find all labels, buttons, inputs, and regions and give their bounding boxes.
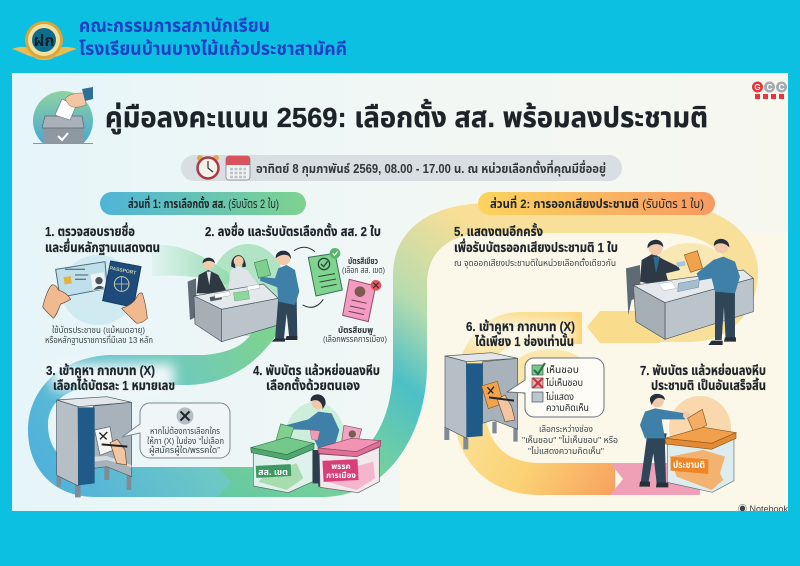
callout text: ผู้สมัครผู้ใด/พรรคใด” (149, 445, 220, 456)
step 6 heading (466, 319, 575, 349)
logo: GCC: C (767, 83, 773, 92)
step 7 heading (640, 363, 766, 393)
pink ballot label: (เลือกพรรคการเมือง) (323, 334, 387, 344)
main panel (12, 73, 788, 511)
step 6 note (522, 424, 618, 456)
icon: X mark (176, 408, 194, 424)
callout text: หากไม่ต้องการเลือกใคร (150, 426, 220, 436)
step 5 heading (454, 222, 618, 268)
step 6 note: "เห็นชอบ" "ไม่เห็นชอบ" หรือ (522, 435, 618, 445)
title: คู่มือลงคะแนน 2569: เลือกตั้ง สส. พร้อมลงประชามติ (105, 98, 708, 135)
date text: อาทิตย์ 8 กุมภาพันธ์ 2569, 08.00 - 17.00 น. ณ หน่วยเลือกตั้งที่คุณมีชื่ออยู่ (256, 160, 606, 177)
ribbon: yellow arch and return arrow (469, 218, 743, 479)
step 6 note: "ไม่แสดงความคิดเห็น" (528, 446, 604, 456)
box label: party: การเมือง (326, 470, 356, 480)
header: council name (79, 16, 347, 60)
step 3 heading: เลือกได้บัตรละ 1 หมายเลข (53, 378, 175, 393)
step 3 heading: 3. เข้าคูหา กากบาท (X) (46, 363, 155, 379)
heading: part 2 (478, 192, 715, 215)
step 7 heading: 7. พับบัตร แล้วหย่อนลงหีบ (640, 363, 766, 378)
option: no opinion: ไม่แสดง (545, 392, 574, 403)
step 5 heading: เพื่อรับบัตรออกเสียงประชามติ 1 ใบ (454, 238, 618, 255)
pink ballot label: บัตรสีชมพู (338, 325, 373, 335)
step 5 heading: 5. แสดงตนอีกครั้ง (454, 222, 543, 239)
heading: part 2: ส่วนที่ 2: การออกเสียงประชามติ (รับบัตร 1 ใบ) (490, 195, 704, 211)
header: school logo (12, 21, 77, 60)
icon: calendar (226, 156, 250, 180)
step 1 note: ใช้บัตรประชาชน (แม้หมดอายุ) (52, 325, 145, 335)
icon: alarm clock (197, 155, 219, 178)
box label: party: พรรค (331, 462, 351, 471)
step 1 illustration: ID card and passport in hands (43, 261, 147, 323)
step 1 heading (45, 222, 160, 255)
pink ballot label (323, 325, 387, 344)
step 4 heading: 4. พับบัตร แล้วหย่อนลงหีบ (253, 363, 380, 378)
date and place pill (181, 155, 622, 181)
box label: referendum: ประชามติ (673, 460, 705, 471)
step 1 heading: 1. ตรวจสอบรายชื่อ (45, 222, 135, 239)
step 3 illustration: voting booth (57, 397, 132, 497)
header: school logo: ฝก (34, 33, 54, 50)
step 7 illustration: voter and referendum box (639, 394, 736, 492)
logo: GCC: C (779, 83, 785, 92)
callout text: ให้กา (X) ในช่อง “ไม่เลือก (147, 436, 224, 446)
green ballot label: (เลือก สส. เขต) (342, 265, 385, 275)
option: no opinion (532, 392, 589, 414)
ribbon: part 1 green and blue path (28, 203, 743, 497)
step 2 heading: 2. ลงชื่อ และรับบัตรเลือกตั้ง สส. 2 ใบ (205, 222, 381, 239)
step 1 illustration: ID card and passport in hands: PASSPORT (109, 265, 137, 277)
step 7 heading: ประชามติ เป็นอันเสร็จสิ้น (651, 377, 766, 393)
option: disagree: ไม่เห็นชอบ (545, 378, 583, 389)
green ballot card (294, 247, 342, 307)
ribbon: bottom green rising into yellow arch (217, 203, 490, 497)
header: council name: คณะกรรมการสภานักเรียน (79, 16, 270, 37)
step 1 note: หรือหลักฐานราชการที่มีเลข 13 หลัก (45, 334, 153, 345)
step 6 heading: ได้เพียง 1 ช่องเท่านั้น (475, 332, 574, 349)
option: no opinion: ความคิดเห็น (546, 403, 589, 414)
callout text (147, 426, 224, 456)
step 1 note (45, 325, 153, 345)
step 4 heading (253, 363, 380, 393)
logo: GCC (752, 82, 787, 99)
step 5 illustration: officer and voter at desk (626, 239, 753, 345)
box label: district MP: สส. เขต (258, 467, 288, 477)
step 6 heading: 6. เข้าคูหา กากบาท (X) (466, 319, 575, 335)
step 4 illustration: voter and two ballot boxes (251, 394, 381, 493)
logo: GCC: G (754, 83, 761, 92)
NotebookLM mark: ◉ NotebookLM (738, 504, 800, 514)
heading: part 1: ส่วนที่ 1: การเลือกตั้ง สส. (รับบัตร 2 ใบ) (128, 195, 279, 211)
step 3 callout (122, 403, 230, 458)
step 6 callout: choices (507, 358, 604, 417)
step 4 heading: เลือกตั้งด้วยตนเอง (266, 376, 360, 393)
step 3 heading (46, 363, 175, 393)
option: agree: เห็นชอบ (546, 365, 579, 376)
step 1 heading: และยื่นหลักฐานแสดงตน (45, 238, 160, 255)
green ballot label (342, 256, 385, 275)
heading: part 1 (100, 192, 306, 215)
icon: ballot box with hand (33, 87, 93, 144)
box label: party (322, 459, 359, 482)
step 2 illustration: officials at desk and voter (188, 251, 299, 342)
header: council name: โรงเรียนบ้านบางไม้แก้วประชาสามัคคี (79, 38, 347, 60)
step 5 heading: ณ จุดออกเสียงประชามติในหน่วยเลือกตั้งเดียวกัน (454, 257, 616, 268)
pink ballot card (343, 279, 381, 322)
box label: district MP (256, 464, 291, 478)
step 6 note: เลือกระหว่างช่อง (539, 424, 593, 434)
green ballot label: บัตรสีเขียว (348, 256, 378, 266)
step 6 illustration: voting booth (444, 353, 518, 449)
